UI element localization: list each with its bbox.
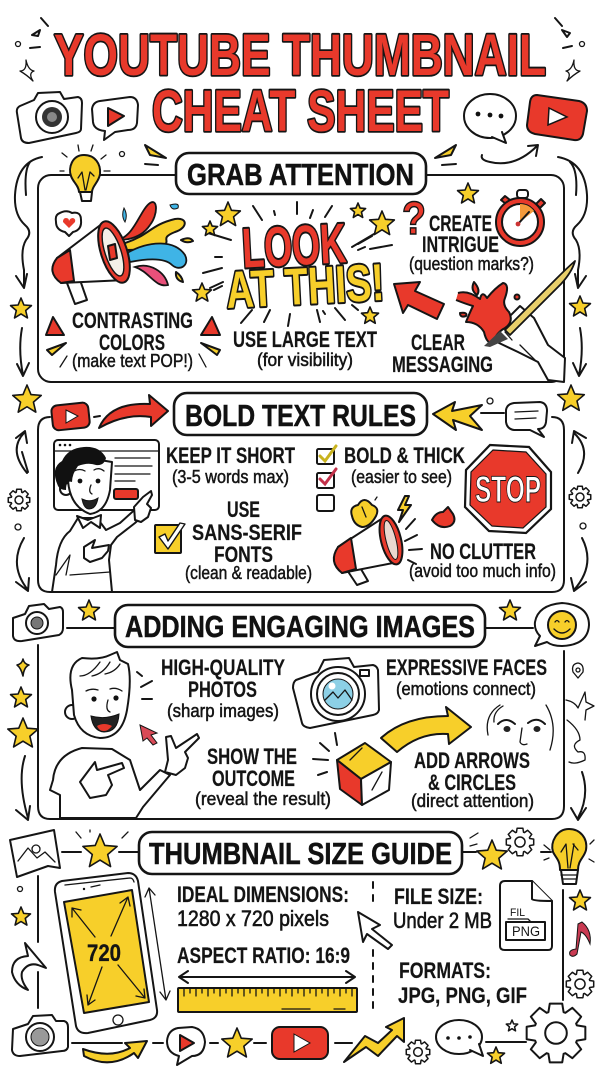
icon: bulb right — [544, 829, 594, 884]
icons: bulb, lightning, cluster — [351, 496, 454, 527]
icon: top play bubble — [92, 97, 138, 140]
text: no clutter — [409, 539, 556, 581]
illustration: phone with 720: 720 — [87, 940, 121, 967]
arrow: bottom yellow curved — [72, 1041, 526, 1062]
top sparkle decorations — [16, 18, 584, 81]
text: bold and thick: (easier to see) — [351, 467, 452, 487]
text: add arrows and circles — [411, 748, 534, 811]
icon: bottom play bubble — [167, 1027, 205, 1065]
illustration: expressive face — [487, 705, 553, 750]
panel: bold text rules — [8, 385, 591, 592]
icon: megaphone two — [334, 513, 422, 585]
icon: question mark: ? — [402, 192, 426, 244]
side stars section one — [11, 296, 590, 318]
text: clear messaging — [392, 330, 493, 377]
panel: thumbnail size guide — [10, 828, 594, 1065]
text: formats: JPG, PNG, GIF — [398, 983, 527, 1008]
star right of heading — [500, 600, 520, 620]
heading: grab attention: GRAB ATTENTION — [187, 157, 414, 192]
arrow: yellow curved — [381, 707, 471, 752]
illustration: phone with 720 — [55, 873, 170, 1033]
icon: heart bubble — [56, 211, 81, 236]
arrow: yellow zigzag growth — [344, 1018, 404, 1062]
text: keep it short: KEEP IT SHORT — [166, 443, 295, 468]
arrow: red pointing up-left — [394, 282, 444, 319]
text: high quality photos: PHOTOS — [188, 677, 257, 702]
side swirls left — [15, 157, 42, 376]
text: contrasting colors: (make text POP!) — [72, 351, 193, 371]
star left of heading — [76, 830, 128, 867]
text: file size: Under 2 MB — [393, 908, 492, 933]
icon: bottom camera — [12, 1015, 68, 1056]
arrow: width double-headed — [179, 971, 355, 983]
text: ideal dimensions — [177, 882, 349, 931]
text: sans-serif fonts: USE — [227, 497, 260, 522]
checkboxes — [317, 446, 336, 511]
text: keep it short: (3-5 words max) — [172, 467, 289, 487]
text: formats: FORMATS: — [399, 958, 491, 983]
icon: file PNG — [500, 881, 552, 950]
text: show the outcome: (reveal the result) — [195, 789, 331, 809]
icon: browser window — [54, 440, 159, 510]
text: create intrigue: CREATE — [429, 211, 492, 236]
side swirls right — [558, 157, 587, 376]
callout: LOOK AT THIS — [203, 202, 392, 326]
icon: stopwatch — [496, 190, 545, 246]
stars around LOOK — [192, 183, 478, 323]
panel: grab attention — [15, 145, 587, 382]
title — [54, 23, 546, 144]
icon: paint splat and brush in hand — [456, 261, 575, 382]
star left of heading — [79, 600, 99, 620]
text: use large text: (for visibility) — [257, 350, 353, 370]
side doodles — [8, 385, 591, 591]
illustration: man pointing — [52, 447, 152, 592]
icon: ruler — [178, 988, 357, 1012]
icon: camera small — [13, 604, 63, 641]
text: aspect ratio: ASPECT RATIO: 16:9 — [177, 943, 350, 968]
decorative yellow sparks by header — [145, 145, 538, 165]
divider dashed — [372, 882, 374, 1012]
text: expressive faces — [386, 655, 547, 699]
icon: bottom YouTube logo — [272, 1027, 328, 1059]
text: expressive faces: EXPRESSIVE FACES — [386, 655, 547, 680]
icon: yellow check box — [155, 523, 185, 553]
text: keep it short — [166, 443, 295, 487]
text: formats — [398, 958, 527, 1008]
gears, bubble, stars — [406, 1004, 585, 1064]
text: sans-serif fonts: FONTS — [214, 542, 273, 567]
icon: stop sign: STOP — [475, 469, 541, 510]
left doodles — [11, 886, 46, 990]
icon: 3D box — [313, 733, 391, 805]
title: CHEAT SHEET — [152, 79, 449, 144]
icon: top camera — [17, 92, 82, 143]
icon: file PNG: FIL — [510, 907, 525, 919]
text: sans-serif fonts: SANS-SERIF — [192, 520, 302, 545]
text: ideal dimensions: IDEAL DIMENSIONS: — [177, 882, 349, 907]
icon: file PNG: PNG — [512, 923, 540, 939]
text: high quality photos: HIGH-QUALITY — [161, 655, 285, 680]
text: contrasting colors: CONTRASTING — [72, 308, 193, 333]
icon: red cursor — [137, 672, 157, 745]
side doodles — [8, 659, 594, 820]
text: ideal dimensions: 1280 x 720 pixels — [177, 906, 329, 931]
text: no clutter: (avoid too much info) — [409, 561, 556, 581]
icon: chat bubble — [506, 402, 547, 437]
text: file size — [393, 884, 492, 933]
text: sans-serif fonts — [185, 497, 312, 583]
icon: YouTube logo small — [51, 402, 100, 431]
panel: adding engaging images — [8, 600, 594, 820]
text: add arrows and circles: (direct attention) — [411, 791, 534, 811]
text: show the outcome: SHOW THE — [207, 744, 297, 769]
callout: LOOK AT THIS: LOOK — [240, 211, 348, 280]
text: contrasting colors — [72, 308, 193, 371]
text: high quality photos: (sharp images) — [167, 701, 279, 721]
star — [222, 1028, 252, 1057]
text: use large text — [233, 327, 377, 370]
bottom icon row — [12, 1004, 585, 1065]
arrow: yellow pointing left — [433, 398, 504, 430]
text: sans-serif fonts: (clean & readable) — [185, 563, 312, 583]
text: clear messaging: CLEAR — [411, 330, 465, 355]
text: show the outcome — [195, 744, 331, 809]
text: file size: FILE SIZE: — [394, 884, 483, 909]
text: clear messaging: MESSAGING — [392, 352, 493, 377]
text: high quality photos — [161, 655, 285, 721]
text: add arrows and circles: ADD ARROWS — [414, 748, 530, 773]
text: create intrigue: (question marks?) — [409, 254, 534, 274]
text: show the outcome: OUTCOME — [212, 766, 295, 791]
text: create intrigue — [409, 211, 534, 274]
text: expressive faces: (emotions connect) — [396, 679, 536, 699]
icon: stop sign — [465, 445, 551, 533]
text: contrasting colors: COLORS — [99, 330, 165, 355]
text: create intrigue: INTRIGUE — [422, 232, 499, 257]
heading: bold text rules — [174, 393, 427, 435]
heading: thumbnail size guide: THUMBNAIL SIZE GUIDE — [149, 836, 452, 871]
illustration: man with open mouth — [50, 652, 199, 818]
text: add arrows and circles: & CIRCLES — [428, 770, 516, 795]
text: use large text: USE LARGE TEXT — [233, 327, 377, 352]
heading: adding engaging images — [115, 605, 485, 647]
arrow: red curved — [99, 395, 168, 428]
icon: picture frame — [10, 830, 60, 877]
icon: top YouTube logo — [527, 95, 587, 140]
heading: adding engaging images: ADDING ENGAGING IMAGES — [125, 609, 475, 644]
icon: mouse cursor — [358, 912, 392, 949]
heading: bold text rules: BOLD TEXT RULES — [185, 398, 416, 433]
icon: large camera — [293, 658, 379, 728]
icon: top speech bubble — [464, 94, 516, 143]
text: bold and thick — [344, 443, 465, 487]
right doodles — [566, 890, 594, 998]
icon: smiley bubble — [535, 603, 589, 646]
text: bold and thick: BOLD & THICK — [344, 443, 465, 468]
accents around contrasting colors — [46, 317, 220, 367]
star and gear right of heading — [470, 828, 534, 869]
icon: light bulb — [60, 145, 124, 201]
callout: LOOK AT THIS: AT THIS! — [225, 254, 386, 320]
text: no clutter: NO CLUTTER — [430, 539, 536, 564]
icon: megaphone with colour splash — [52, 202, 193, 304]
